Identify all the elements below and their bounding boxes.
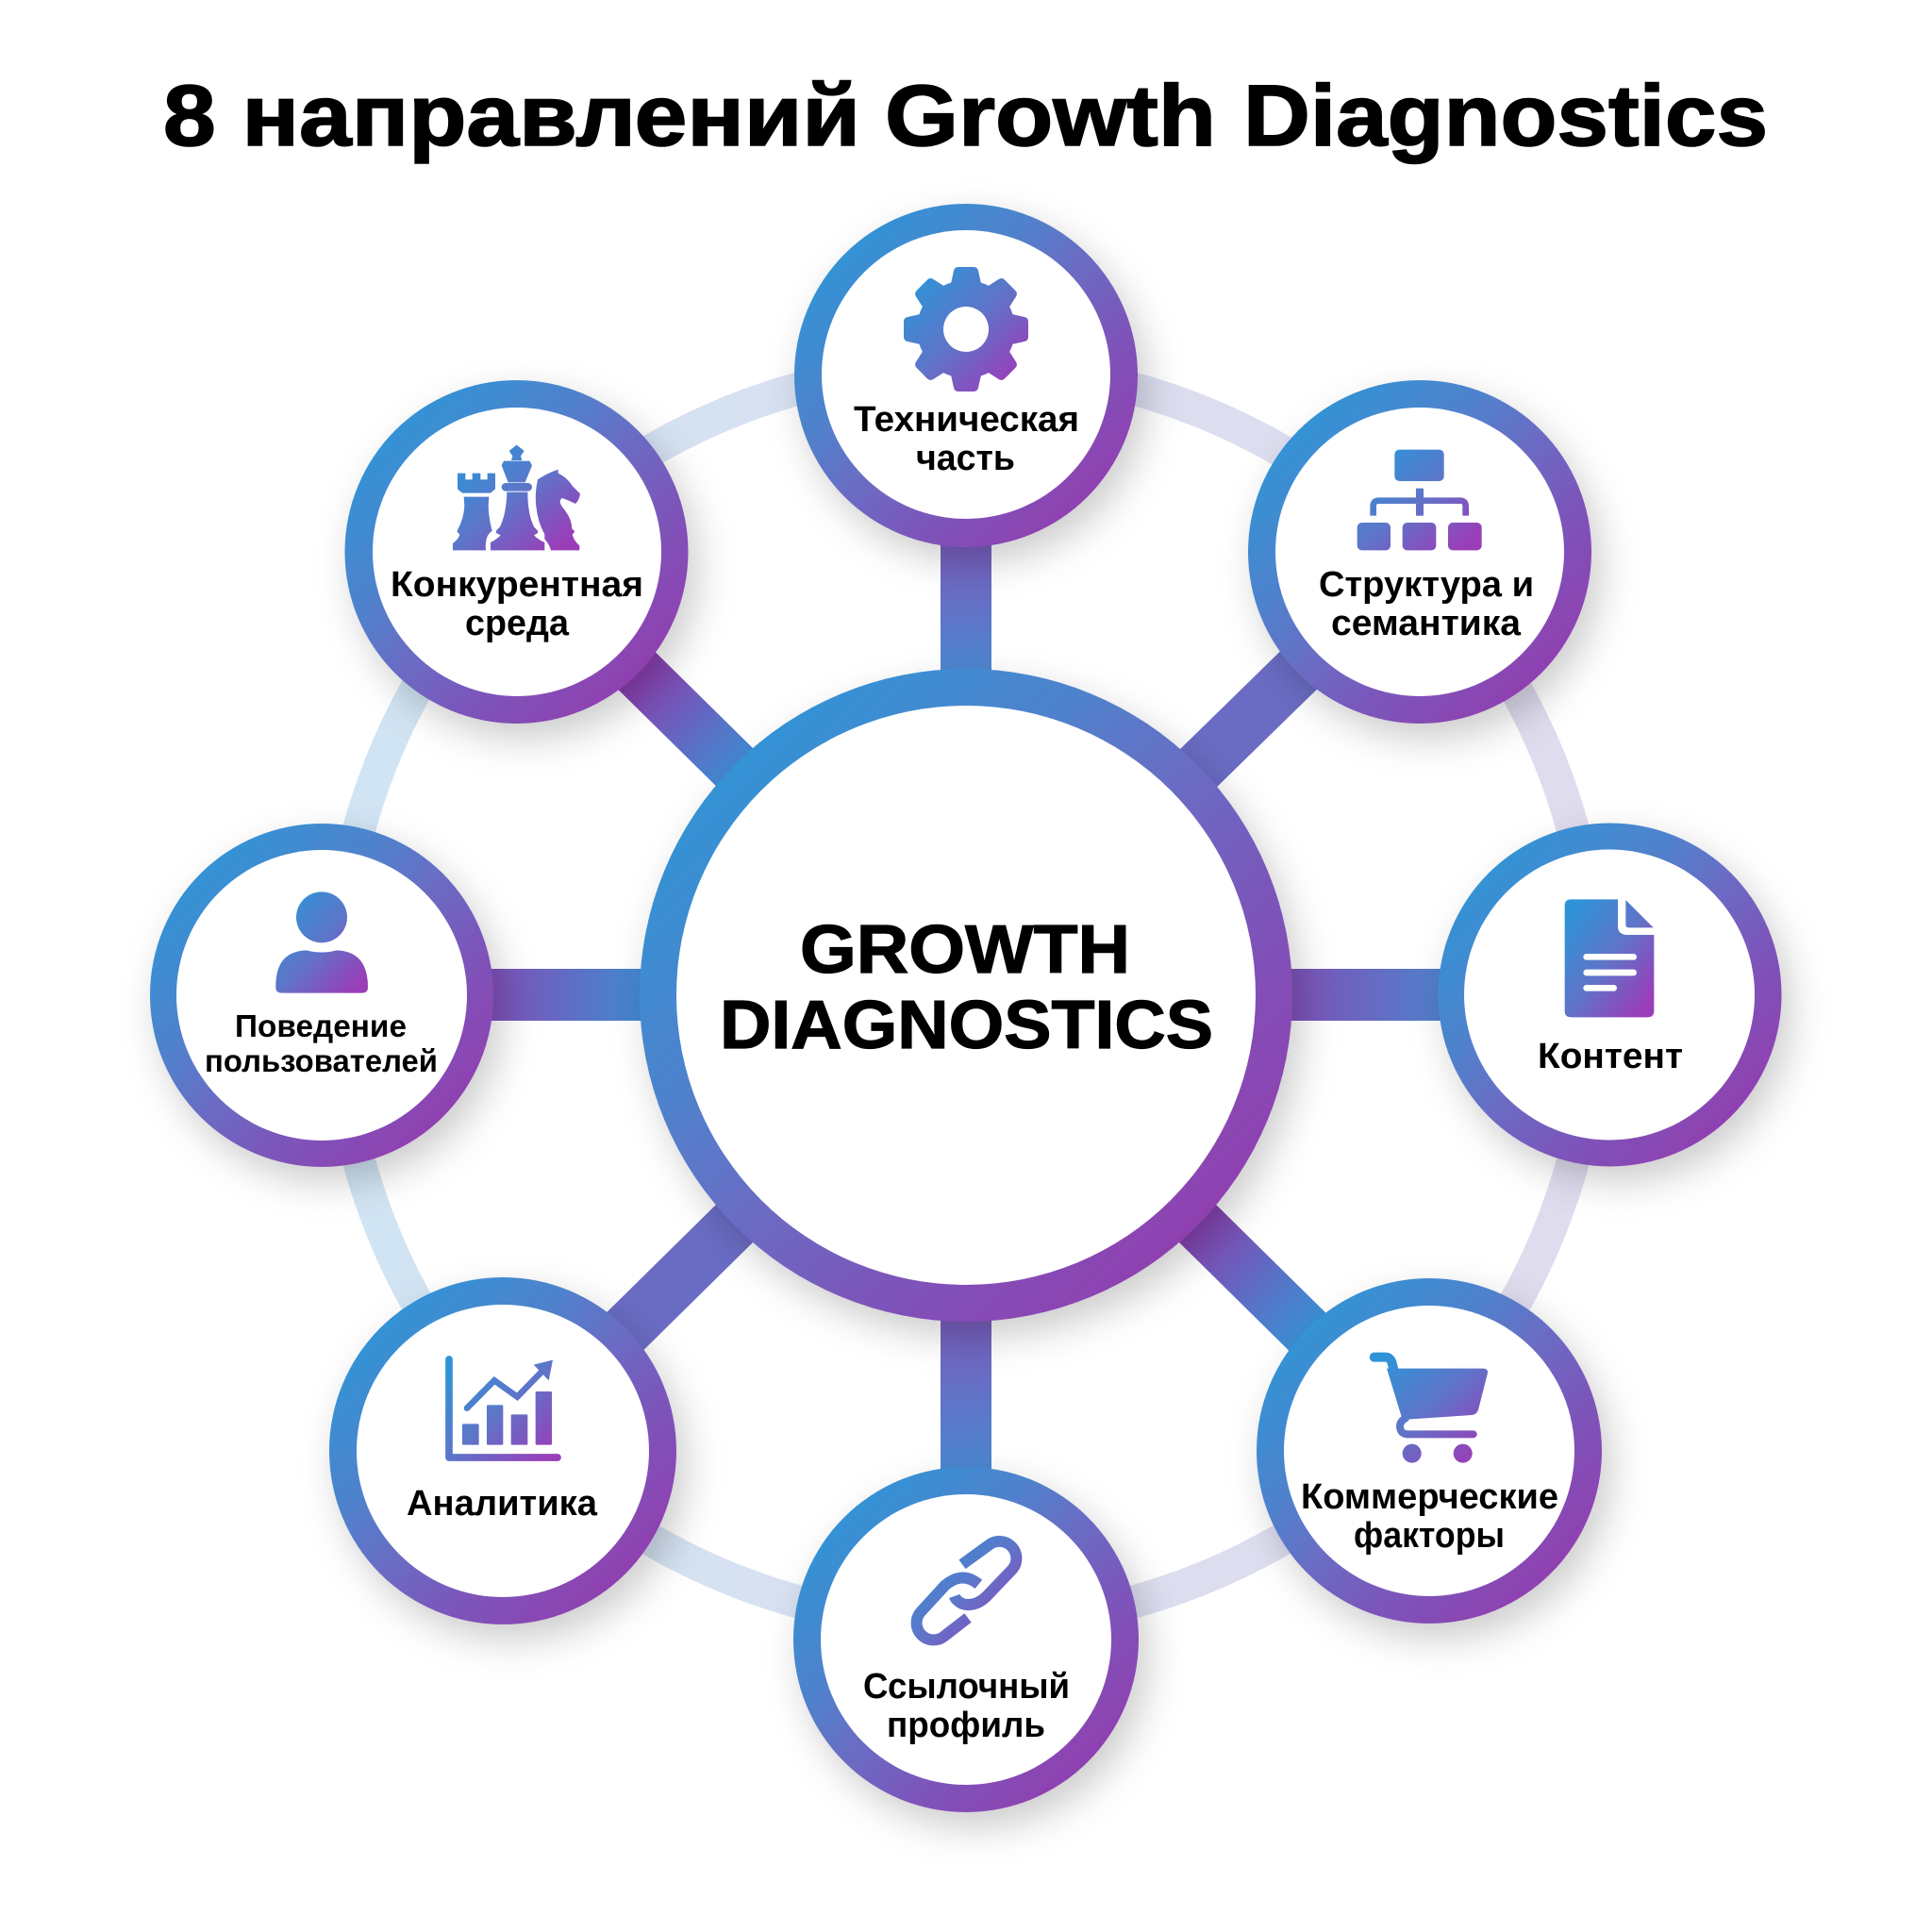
title: Diagnostics <box>1243 68 1768 164</box>
label: Ссылочный <box>863 1667 1070 1707</box>
node: Поведение пользователей <box>150 824 493 1167</box>
title <box>163 68 1768 164</box>
label: Аналитика <box>407 1484 598 1524</box>
label: Структура и <box>1319 565 1534 605</box>
hub label: DIAGNOSTICS <box>720 988 1213 1063</box>
node: Контент <box>1438 823 1781 1166</box>
label: Контент <box>1538 1037 1683 1076</box>
icon: document <box>1564 899 1655 1018</box>
label: Поведение <box>235 1008 407 1043</box>
node: Коммерческие факторы <box>1257 1278 1602 1624</box>
icon: shopping cart <box>1368 1351 1491 1466</box>
node: Ссылочный профиль <box>793 1467 1139 1812</box>
title: 8 направлений <box>163 68 860 164</box>
label: Коммерческие <box>1301 1477 1558 1517</box>
node: Техническая часть <box>794 204 1138 547</box>
label: семантика <box>1331 604 1522 643</box>
label <box>1301 1477 1558 1556</box>
label: факторы <box>1354 1516 1505 1556</box>
label: Конкурентная <box>391 565 643 605</box>
icon: user <box>275 891 369 994</box>
label <box>863 1667 1070 1745</box>
label: пользователей <box>205 1043 438 1078</box>
label: профиль <box>887 1706 1045 1745</box>
central hub <box>640 669 1292 1322</box>
label: Техническая <box>854 400 1079 440</box>
icon: site structure <box>1357 449 1483 551</box>
icon: growth chart <box>443 1355 564 1466</box>
icon: chess pieces <box>453 444 580 551</box>
hub label <box>720 912 1213 1063</box>
label: среда <box>465 604 570 643</box>
label <box>1319 565 1534 643</box>
label <box>391 565 643 643</box>
outer connecting ring <box>337 366 1595 1624</box>
node: Конкурентная среда <box>345 380 689 724</box>
label: часть <box>916 439 1015 478</box>
spokes linking the hub to the eight nodes <box>481 528 1453 1481</box>
node: Структура и семантика <box>1248 380 1591 724</box>
icon: chain link <box>911 1536 1023 1645</box>
title: Growth <box>885 68 1216 164</box>
icon: gear <box>904 267 1028 391</box>
node: Аналитика <box>329 1277 676 1624</box>
hub label: GROWTH <box>800 912 1130 988</box>
label <box>854 400 1079 478</box>
label <box>205 1008 438 1078</box>
